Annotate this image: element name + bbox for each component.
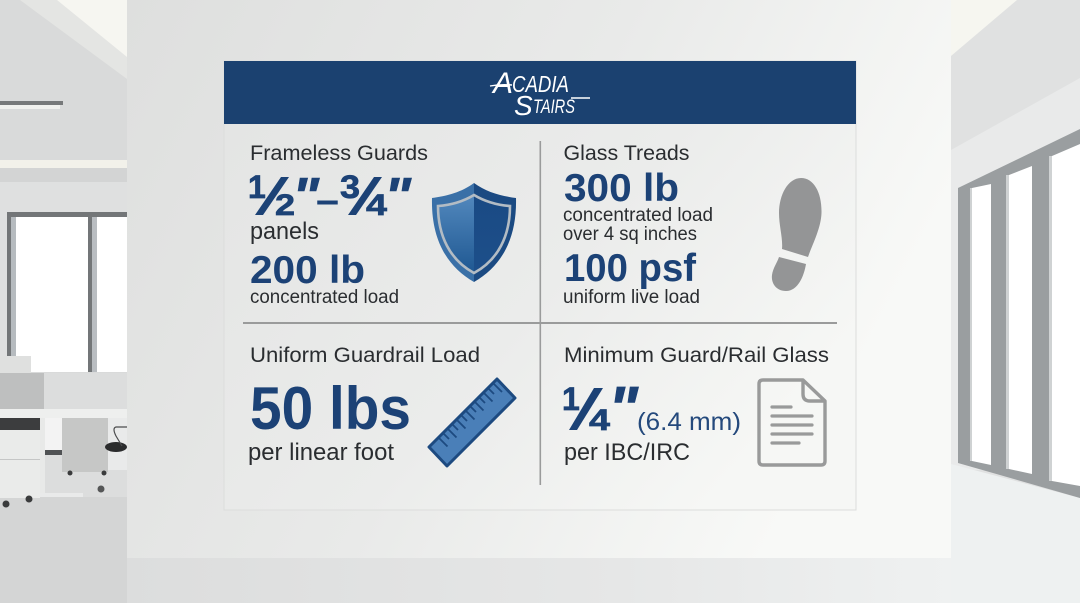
logo: Acadia Stairs [490,67,590,121]
load label: concentrated load [250,287,399,308]
panel: frameless guards [248,142,516,308]
code label: per IBC/IRC [564,439,690,466]
live load label: uniform live load [563,287,700,308]
sign panel [224,61,856,510]
thickness value: " [608,375,640,444]
divider: horizontal [243,322,837,324]
load label: per linear foot [248,439,394,466]
logo: Acadia Stairs: S [514,90,533,121]
background: floor [127,558,951,603]
background: right room with tall windows [950,0,1080,603]
panel thickness value [248,168,412,226]
thickness value: 4 [589,404,610,437]
panel thickness value: 1 [248,169,266,205]
load area label: over 4 sq inches [563,224,697,245]
panel thickness value: 3 [340,169,360,205]
heading: Frameless Guards [250,142,428,165]
panel: minimum guard/rail glass [562,344,829,466]
icon: footprint [772,178,822,291]
panel thickness value: " [384,168,412,226]
panels label: panels [250,218,319,245]
load value: 50 lbs [250,375,411,442]
panel thickness value: 2 [275,189,295,222]
metric value: (6.4 mm) [637,408,741,436]
live load value: 100 psf [564,247,697,290]
load label: concentrated load [563,205,713,226]
icon: shield [432,183,516,282]
load value: 300 lb [564,167,679,210]
background: wall [127,0,951,558]
thickness value [562,375,640,444]
load value: 200 lb [250,249,365,292]
panel: glass treads [563,142,822,308]
heading: Uniform Guardrail Load [250,344,480,367]
icon: document [759,380,825,465]
logo: Acadia Stairs: TAIRS [533,97,575,118]
logo: Acadia Stairs: CADIA [512,71,569,97]
icon: ruler [429,379,515,466]
thickness value: 1 [562,381,580,417]
panel thickness value: " [292,168,320,226]
panel thickness value: – [316,178,339,222]
background: left office room [0,0,128,603]
divider: vertical [540,141,541,485]
heading: Minimum Guard/Rail Glass [564,344,829,367]
logo: Acadia Stairs: A [491,67,513,100]
heading: Glass Treads [564,142,690,165]
panel: uniform guardrail load [248,344,515,466]
panel thickness value: 4 [366,189,387,222]
header band [224,61,856,124]
